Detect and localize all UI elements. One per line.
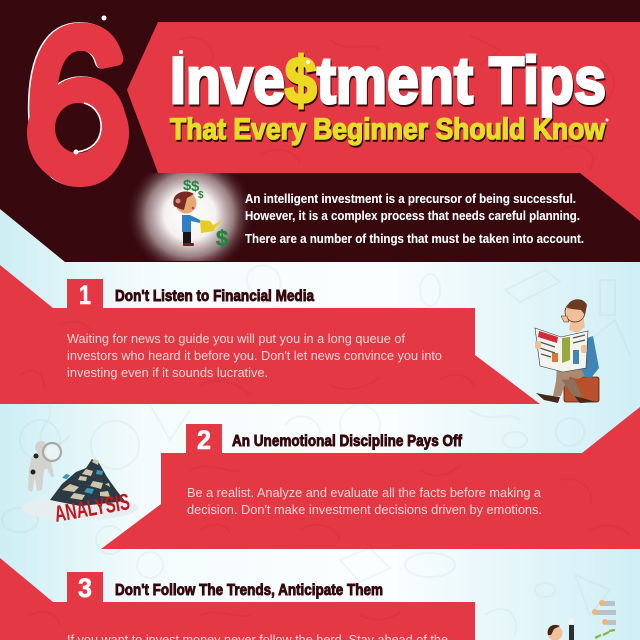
icon: man watering money plant [132,173,248,261]
panel: tip 1 [0,265,540,404]
number 3 [67,572,103,603]
body 2: Be a realist. Analyze and evaluate all the facts before making a [187,486,541,500]
number 1 [67,279,103,310]
icon: analysis pile [22,441,138,527]
title: Inve$tment Tips [170,43,606,117]
icon: man watering money plant: $ [191,178,200,195]
body 1: Waiting for news to guide you will put you in a long queue of [67,332,406,346]
body 1 [67,332,442,380]
number 1: 1 [79,280,91,310]
heading 2: An Unemotional Discipline Pays Off [232,433,463,450]
dark header background [0,0,640,262]
intro text [245,192,584,246]
body 2: decision. Don't make investment decisions driven by emotions. [187,503,542,517]
icon: analysis pile: ANALYSIS [52,488,132,527]
number 2: 2 [197,425,211,455]
panel: tip 3 [0,558,475,640]
icon: man watering money plant: $ [198,190,204,201]
icon: businessman with rising chart [548,600,616,640]
body 1: investors who heard it before you. Don't let news convince you into [67,349,442,363]
panel: tip 2 [101,407,640,549]
icon: man reading newspaper [535,299,599,403]
background doodles [2,266,630,635]
intro text: An intelligent investment is a precursor of being successful. [245,192,576,206]
number 3: 3 [78,573,92,603]
intro text: However, it is a complex process that needs careful planning. [245,209,580,223]
body 2 [187,486,542,517]
header red banner [127,22,640,221]
body 1: investing even if it sounds lucrative. [67,366,268,380]
heading 3: Don't Follow The Trends, Anticipate Them [115,582,383,599]
light background [0,200,640,640]
heading 1: Don't Listen to Financial Media [115,288,314,305]
title sparkles [179,50,608,122]
icon: man watering money plant: $ [183,177,192,194]
intro text: There are a number of things that must be taken into account. [245,232,584,246]
icon: man watering money plant: $ [216,226,228,251]
number 2 [186,424,222,455]
